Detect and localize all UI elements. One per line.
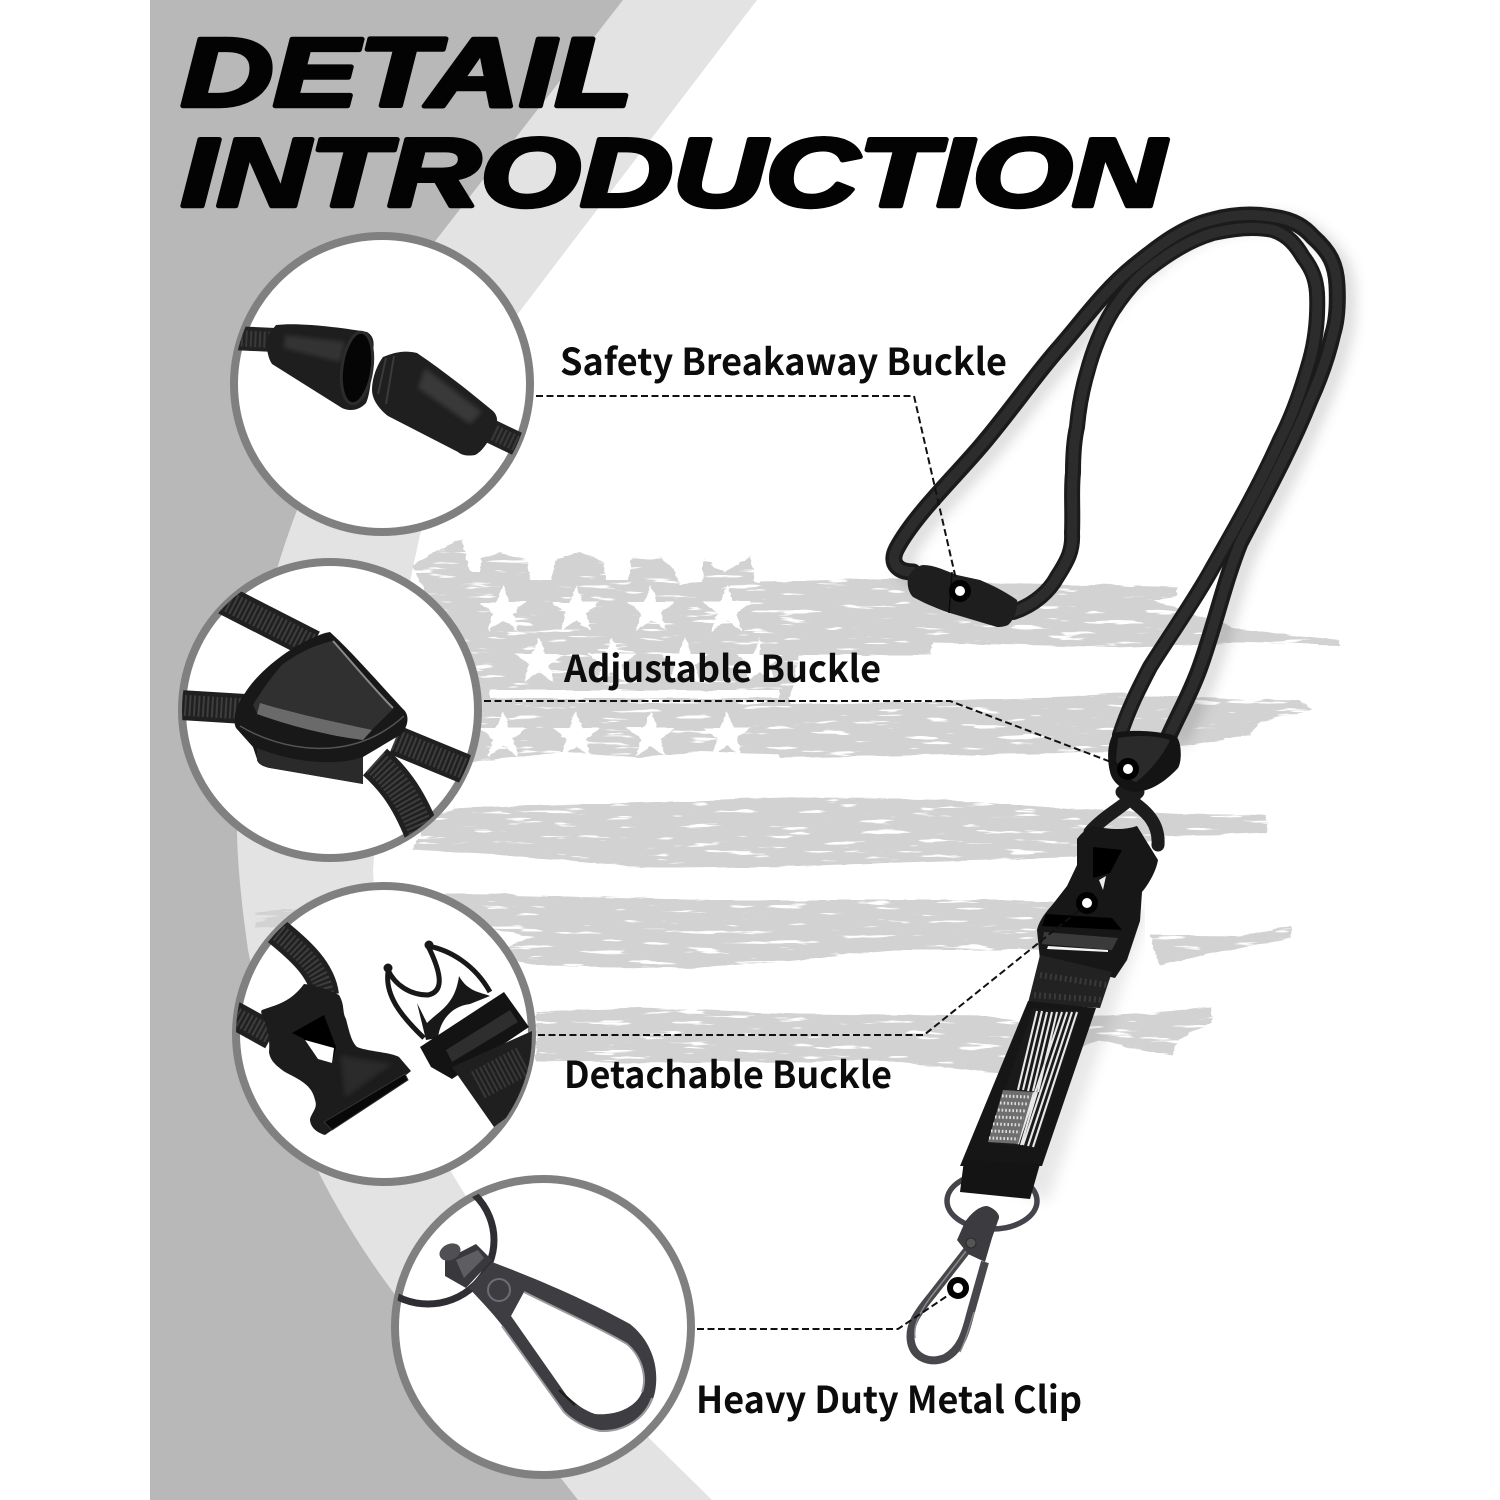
- metal swivel clip: [910, 1206, 999, 1360]
- clip body: [469, 1262, 656, 1431]
- male buckle prongs: [384, 940, 529, 1079]
- breakaway buckle on lanyard: [908, 565, 1017, 627]
- detail circle: safety breakaway buckle: [232, 236, 530, 532]
- flag stripe 4: [255, 892, 1292, 968]
- female buckle: [261, 984, 411, 1135]
- lanyard cord strands: [894, 215, 1337, 845]
- webbing strap: [960, 955, 1112, 1199]
- adjustable buckle on lanyard: [1108, 731, 1181, 792]
- marker dot: metal clip: [950, 1280, 966, 1296]
- marker dot: adjustable buckle: [1120, 761, 1136, 777]
- rope ends: [232, 338, 530, 450]
- flag stripe 3: [412, 797, 1268, 868]
- rivet: [488, 1279, 510, 1301]
- label: heavy duty metal clip: Heavy Duty Metal Clip: [696, 1370, 1082, 1424]
- callout line: safety breakaway buckle: [536, 396, 958, 588]
- marker dot: breakaway buckle: [952, 583, 968, 599]
- shield buckle: [234, 632, 407, 784]
- callout line: adjustable buckle: [484, 701, 1127, 768]
- background band: light grey swoosh: [150, 0, 757, 1500]
- american flag patch on strap: [987, 1008, 1080, 1148]
- flag stripe 1: [760, 578, 1340, 655]
- distressed flag backdrop: [255, 540, 1340, 1074]
- rope strands: [232, 930, 325, 1036]
- flag canton with stars: [412, 540, 800, 762]
- title: INTRODUCTION: [181, 118, 1168, 227]
- swivel head: [440, 1243, 492, 1288]
- strap drop shadow: [1015, 900, 1115, 1190]
- callout line: detachable buckle: [538, 904, 1087, 1035]
- plug cone: [372, 352, 497, 456]
- label: adjustable buckle: Adjustable Buckle: [563, 639, 881, 693]
- webbing: [452, 1031, 532, 1127]
- lanyard product: [894, 215, 1337, 1360]
- flag stripe 2: [770, 694, 1312, 758]
- marker dot: detachable buckle: [1079, 895, 1095, 911]
- open cone socket: [267, 324, 377, 410]
- callout line: heavy duty metal clip: [697, 1290, 956, 1329]
- detail circle: adjustable buckle: [180, 562, 478, 858]
- detail circle: heavy duty metal clip: [362, 1176, 691, 1475]
- label: detachable buckle: Detachable Buckle: [564, 1045, 892, 1099]
- title: [181, 18, 1168, 227]
- lanyard drop shadow: [904, 221, 1347, 744]
- label: safety breakaway buckle: Safety Breakaway Buckle: [560, 332, 1007, 386]
- background band: dark grey swoosh: [150, 0, 623, 1500]
- split ring: [398, 1194, 498, 1308]
- detachable buckle on lanyard: [1037, 826, 1158, 978]
- metal d-ring: [947, 1173, 1037, 1229]
- detail circle: detachable buckle: [232, 886, 532, 1182]
- rope strands: [180, 600, 475, 840]
- title: DETAIL: [181, 18, 633, 127]
- flag stripe 5: [536, 1008, 1212, 1074]
